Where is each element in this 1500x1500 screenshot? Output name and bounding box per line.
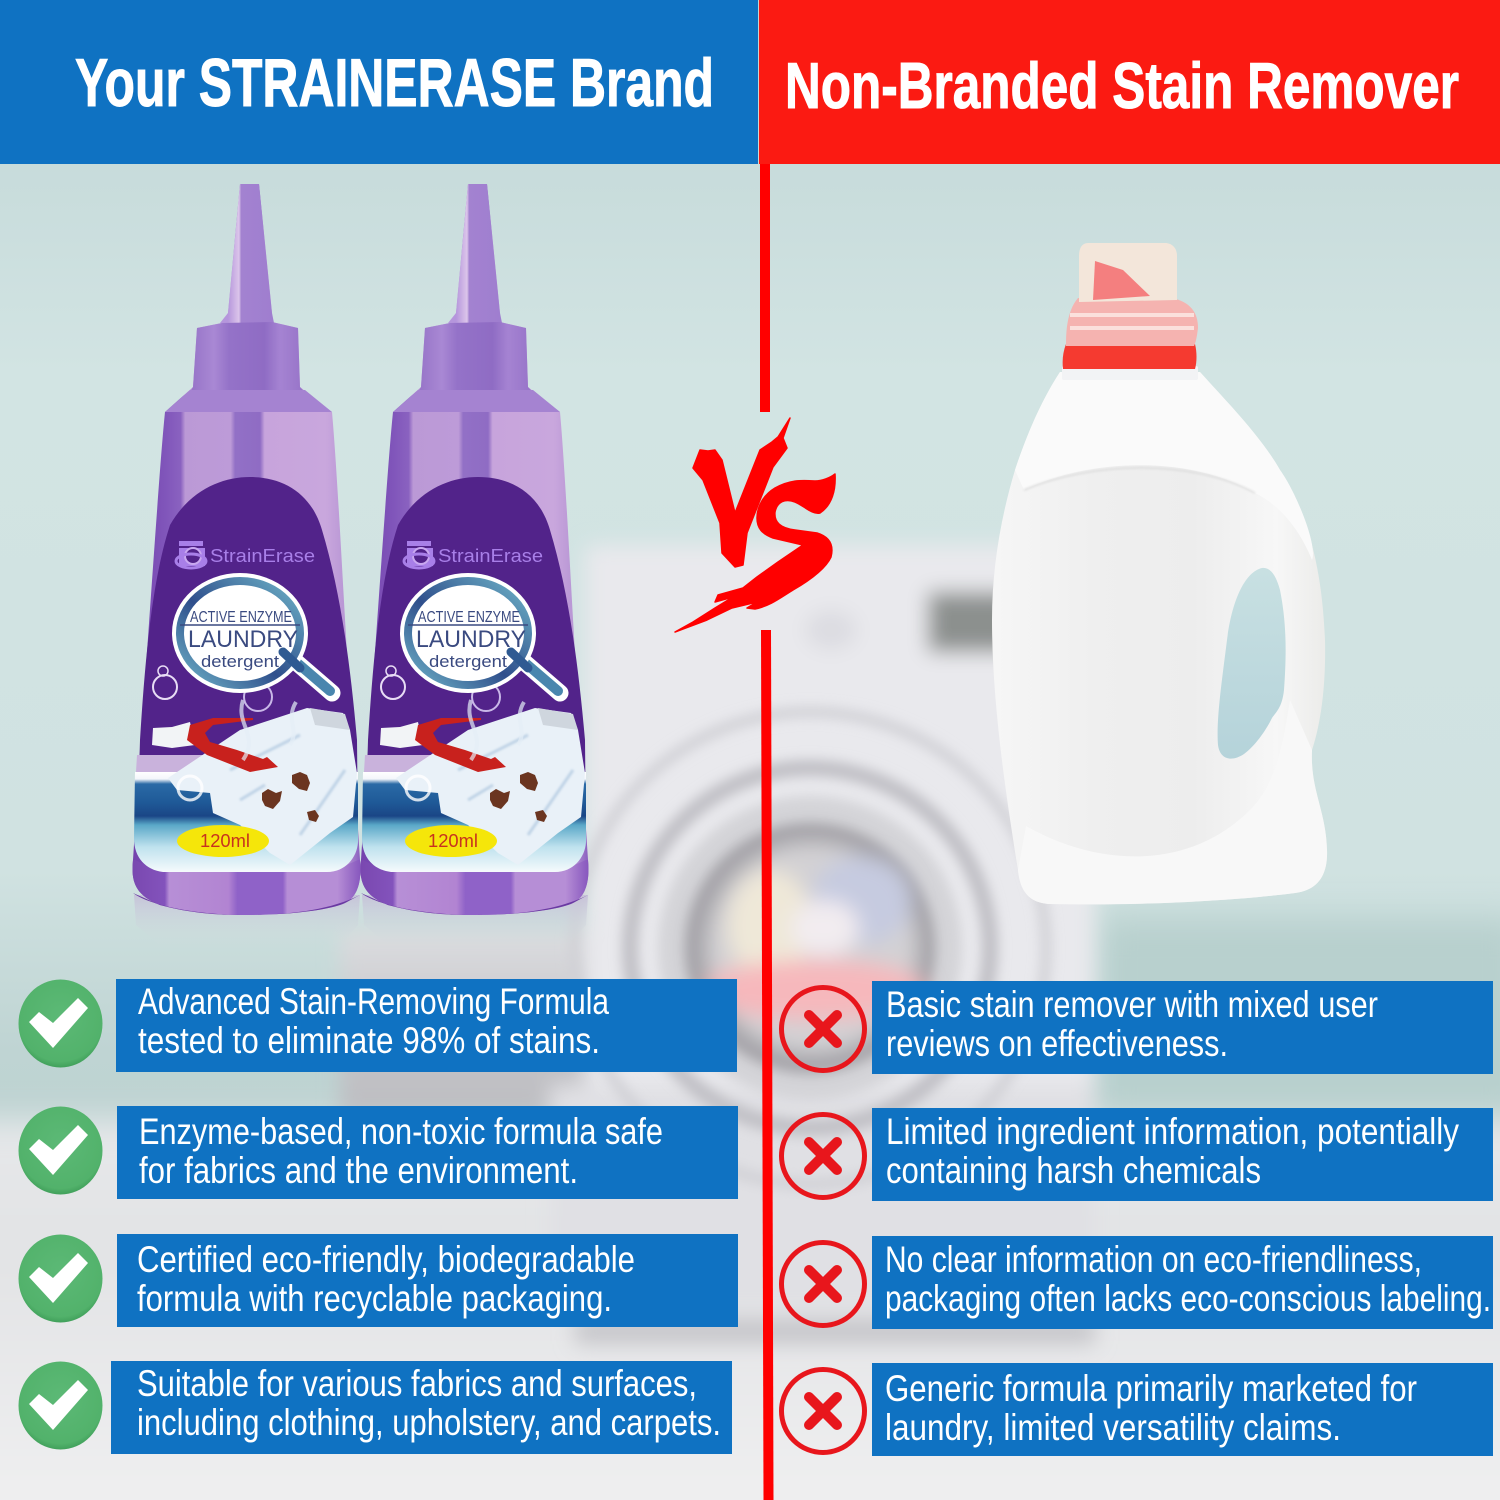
claim box — [872, 1363, 1493, 1456]
row 1 left: check and claim — [18, 979, 737, 1072]
row 3 left: check and claim — [18, 1234, 738, 1327]
claim box: Suitable for various fabrics and surfaces, — [137, 1363, 697, 1404]
label: magnifier badge: detergent — [429, 652, 507, 671]
claim box: Advanced Stain-Removing Formula — [138, 981, 609, 1022]
label: StrainErase logo — [404, 541, 543, 568]
claim box: Certified eco-friendly, biodegradable — [137, 1239, 635, 1280]
product: StrainErase bottle left — [132, 184, 360, 945]
row 1 right: cross and claim — [782, 981, 1493, 1074]
claim box: formula with recyclable packaging. — [137, 1278, 612, 1319]
label: lower photo band — [362, 700, 586, 872]
label: 120ml badge: 120ml — [200, 831, 250, 851]
label: lower photo band — [134, 700, 358, 872]
icon: green check — [18, 1106, 102, 1194]
label: purple arch — [365, 477, 586, 840]
red arrow — [415, 718, 506, 772]
claim box: Enzyme-based, non-toxic formula safe — [139, 1111, 663, 1152]
handle opening — [1218, 568, 1286, 759]
red arrow — [187, 718, 278, 772]
product: StrainErase bottle right — [360, 184, 588, 945]
claim box: including clothing, upholstery, and carpets. — [137, 1402, 721, 1443]
claim box — [116, 979, 737, 1072]
icon: green check — [18, 980, 102, 1068]
VS mark — [675, 418, 835, 632]
claim box — [872, 1236, 1493, 1329]
claim box — [117, 1234, 738, 1327]
row 2 right: cross and claim — [782, 1108, 1493, 1201]
label: magnifier badge: LAUNDRY — [416, 626, 526, 653]
label: magnifier badge: ACTIVE ENZYME — [418, 609, 520, 626]
claim box: Generic formula primarily marketed for — [885, 1368, 1417, 1409]
bottle red band — [1063, 344, 1196, 369]
icon: red cross — [782, 988, 864, 1070]
claim box: reviews on effectiveness. — [886, 1023, 1228, 1064]
bottle neck — [1062, 366, 1198, 380]
label: StrainErase logo: StrainErase — [210, 546, 315, 566]
claim box: tested to eliminate 98% of stains. — [138, 1020, 600, 1061]
claim box: for fabrics and the environment. — [139, 1150, 578, 1191]
header panel: non-branded — [759, 0, 1500, 164]
label: 120ml badge: 120ml — [428, 831, 478, 851]
icon: red cross — [782, 1242, 864, 1326]
label: magnifier badge — [153, 573, 332, 711]
label: 120ml badge — [177, 825, 269, 857]
icon: green check — [18, 1234, 102, 1322]
icon: red cross — [782, 1114, 864, 1198]
label: StrainErase logo: StrainErase — [438, 546, 543, 566]
claim box — [117, 1106, 738, 1199]
row 3 right: cross and claim — [782, 1236, 1493, 1329]
icon: green check — [18, 1362, 102, 1450]
claim box: Basic stain remover with mixed user — [886, 984, 1378, 1025]
label: magnifier badge: LAUNDRY — [188, 626, 298, 653]
label: purple arch — [137, 477, 358, 840]
row 4 left: check and claim — [18, 1361, 732, 1454]
label: StrainErase logo — [176, 541, 315, 568]
icon: red cross — [782, 1370, 864, 1452]
label: 120ml badge — [405, 825, 497, 857]
claim box — [111, 1361, 732, 1454]
label: magnifier badge — [381, 573, 560, 711]
claim box — [872, 1108, 1493, 1201]
heading: Your STRAINERASE Brand: Your STRAINERASE Brand — [75, 45, 714, 121]
label: magnifier badge: detergent — [201, 652, 279, 671]
header panel: StrainErase brand — [0, 0, 758, 164]
product: generic white detergent bottle — [992, 243, 1327, 904]
claim box: containing harsh chemicals — [886, 1150, 1261, 1191]
claim box — [872, 981, 1493, 1074]
row 4 right: cross and claim — [782, 1363, 1493, 1456]
label: magnifier badge: ACTIVE ENZYME — [190, 609, 292, 626]
row 2 left: check and claim — [18, 1106, 738, 1199]
bottle clear cap — [1079, 243, 1177, 302]
divider: upper red line — [760, 160, 770, 412]
bottle pink collar — [1066, 298, 1198, 346]
divider: lower red line — [761, 630, 774, 1500]
claim box: laundry, limited versatility claims. — [885, 1407, 1341, 1448]
